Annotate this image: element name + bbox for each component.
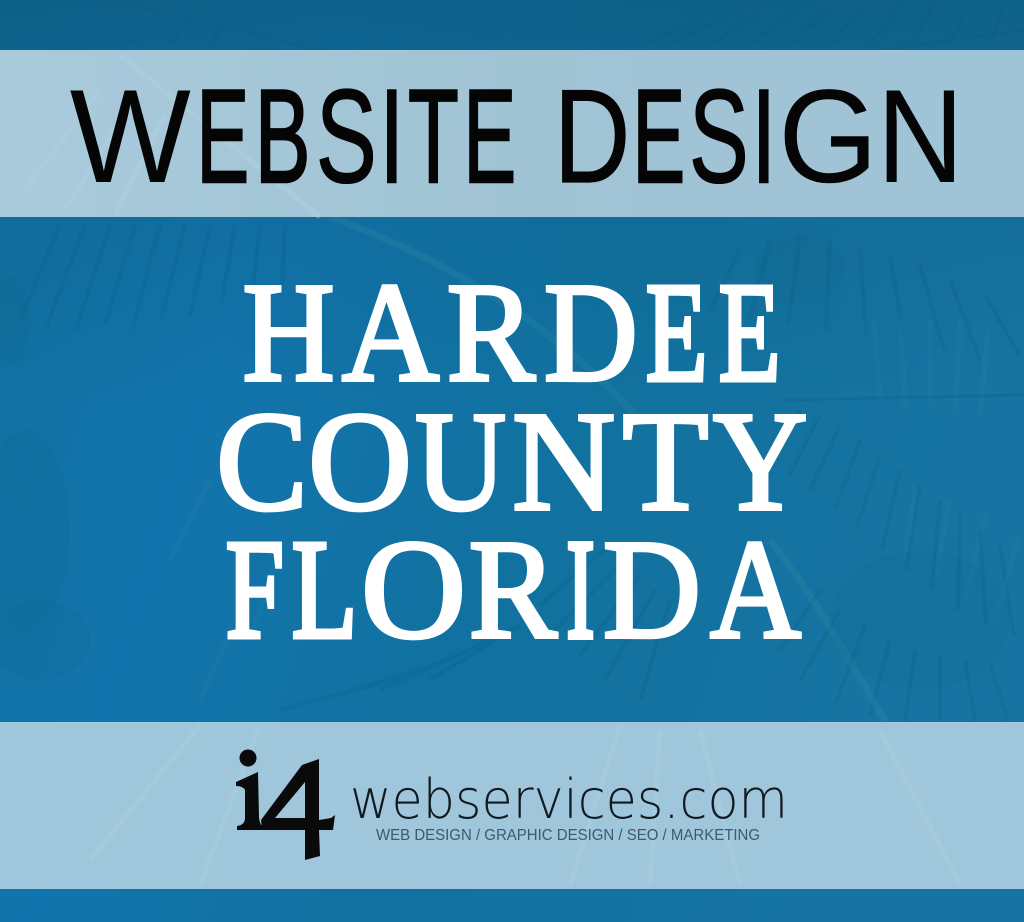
title line: hardee: H [243,253,335,411]
title line: florida: F [226,510,284,668]
logo mark: i4 [236,750,335,860]
heading: website design: S [689,63,749,211]
heading: website design: B [255,63,310,211]
title line: hardee: E [719,253,780,411]
heading: website design: G [778,63,878,211]
title line: county: Y [713,382,808,540]
heading: website design: T [408,63,459,211]
title line: florida [226,510,801,668]
heading: website design: I [380,63,404,211]
heading: website design [70,63,964,211]
title line: county: O [308,382,412,540]
title: hardee county florida [216,253,807,668]
title line: florida: L [292,510,357,668]
logo tagline: WEB DESIGN / GRAPHIC DESIGN / SEO / MARKETING [376,827,760,844]
logo wordmark: webservices.com [350,768,788,831]
title line: hardee: E [646,253,707,411]
title line: county: U [415,382,506,540]
heading: website design: D [554,63,630,211]
title line: county: C [216,382,308,540]
heading: website design: S [316,63,377,211]
heading: website design: N [877,63,964,211]
title line: hardee [243,253,780,411]
heading: website design: W [70,63,191,211]
title line: county [216,382,807,540]
heading: website design: I [752,63,776,211]
bottom banner band [0,722,1024,889]
title line: florida: I [566,510,594,668]
title line: county: N [512,382,615,540]
title line: florida: D [603,510,701,668]
top banner band [0,50,1024,217]
title line: hardee: R [447,253,535,411]
heading: website design: E [632,63,685,211]
title line: florida: O [361,510,466,668]
heading: website design: E [464,63,516,211]
title line: florida: R [469,510,557,668]
title line: hardee: A [342,253,439,411]
title line: florida: A [710,510,801,668]
heading: website design: E [196,63,249,211]
logo: i4 webservices [236,750,788,860]
title line: county: T [623,382,708,540]
title line: hardee: D [544,253,638,411]
